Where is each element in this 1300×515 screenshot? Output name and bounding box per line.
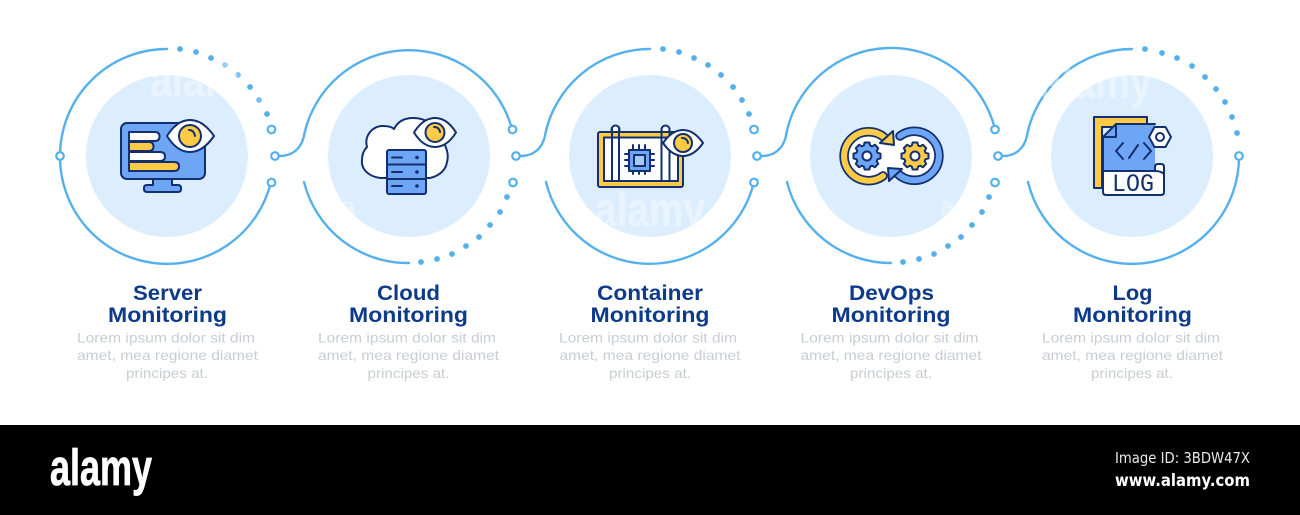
heading: cloud monitoring: Cloud xyxy=(377,282,440,305)
watermark overlays: a xyxy=(940,191,955,221)
watermark overlays xyxy=(150,54,1152,237)
background circle xyxy=(810,75,972,237)
description: log: amet, mea regione diamet xyxy=(1042,347,1223,363)
icon: monitor with eye xyxy=(121,120,214,192)
footer logo: alamy xyxy=(50,439,152,496)
ring: container xyxy=(512,46,758,264)
description: log: Lorem ipsum dolor sit dim xyxy=(1042,330,1220,346)
description: container: amet, mea regione diamet xyxy=(560,347,741,363)
heading: devops monitoring: Monitoring xyxy=(832,304,950,327)
heading: log monitoring: Monitoring xyxy=(1073,304,1192,327)
background circle xyxy=(1051,75,1213,237)
heading: log monitoring: Log xyxy=(1112,282,1152,305)
icon: container chip with eye xyxy=(598,126,703,187)
description: devops: principes at. xyxy=(850,365,932,381)
panel: devops monitoring xyxy=(753,48,999,381)
panel: server monitoring xyxy=(56,46,275,381)
description: cloud: Lorem ipsum dolor sit dim xyxy=(318,330,496,346)
ring: cloud xyxy=(271,50,517,265)
ring: server xyxy=(56,46,275,264)
description: server: amet, mea regione diamet xyxy=(77,347,258,363)
heading: cloud monitoring: Monitoring xyxy=(349,304,468,327)
icon: cloud server with eye xyxy=(362,118,456,194)
image id: Image ID: 3BDW47X xyxy=(1115,449,1250,467)
panel: container monitoring xyxy=(512,46,758,381)
watermark overlays: alamy xyxy=(595,184,705,237)
icon: log file: LOG xyxy=(1112,170,1154,199)
heading: server monitoring: Server xyxy=(133,282,202,305)
description: container: principes at. xyxy=(609,365,691,381)
background circle xyxy=(328,75,490,237)
description: container: Lorem ipsum dolor sit dim xyxy=(559,330,737,346)
panel: log monitoring xyxy=(994,46,1243,381)
watermark overlays: a xyxy=(341,191,356,221)
footer bar xyxy=(0,425,1300,515)
panel: cloud monitoring xyxy=(271,50,517,381)
heading: devops monitoring: DevOps xyxy=(849,282,934,305)
background circle xyxy=(569,75,731,237)
description: server: principes at. xyxy=(126,365,208,381)
watermark overlays: alamy xyxy=(1040,56,1152,109)
description: devops: amet, mea regione diamet xyxy=(800,347,982,363)
icon: log file xyxy=(1094,117,1171,199)
ring: devops xyxy=(753,48,999,265)
description: server: Lorem ipsum dolor sit dim xyxy=(77,330,255,346)
description: cloud: principes at. xyxy=(368,365,450,381)
icon: devops gears and arrows xyxy=(843,131,940,181)
watermark overlays: alam xyxy=(150,54,240,107)
heading: container monitoring: Monitoring xyxy=(590,304,710,327)
description: devops: Lorem ipsum dolor sit dim xyxy=(800,330,978,346)
ring: log xyxy=(994,46,1243,264)
website: www.alamy.com xyxy=(1115,471,1250,491)
description: cloud: amet, mea regione diamet xyxy=(318,347,499,363)
heading: server monitoring: Monitoring xyxy=(108,304,227,327)
heading: container monitoring: Container xyxy=(597,282,703,305)
background circle xyxy=(86,75,248,237)
description: log: principes at. xyxy=(1091,365,1173,381)
